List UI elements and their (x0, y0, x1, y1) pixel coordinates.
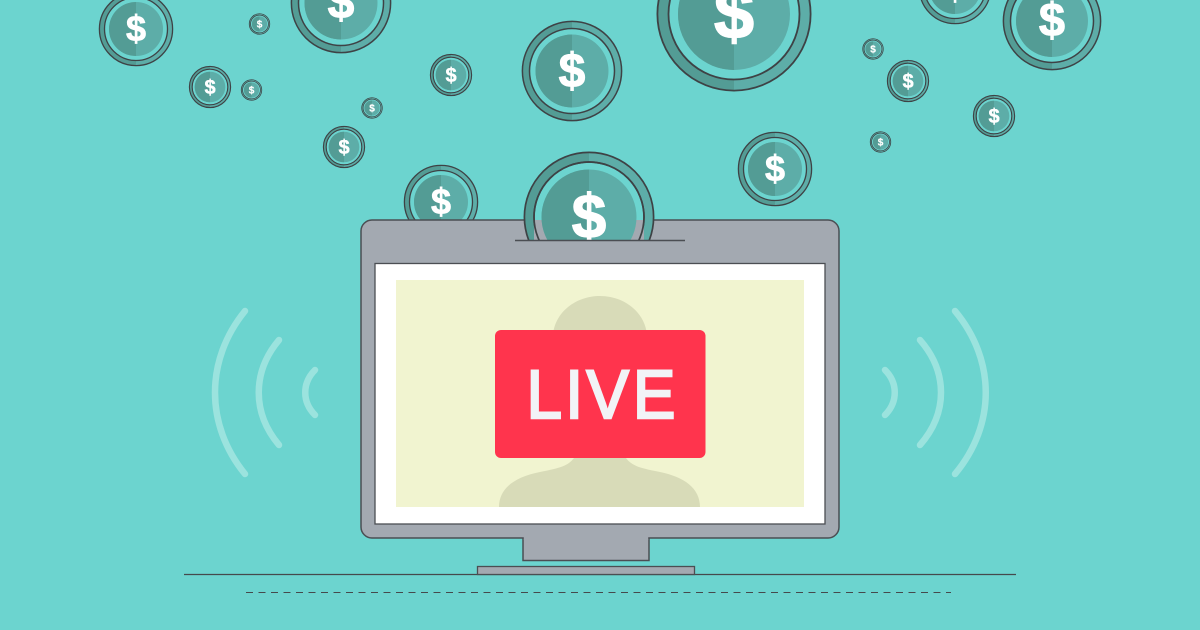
dashed ground line (246, 592, 951, 594)
coin: top right partially cropped (919, 0, 991, 24)
coin: small far left (189, 66, 231, 108)
coin: entering slot (524, 152, 654, 240)
coin: top left medium: $ (126, 8, 146, 49)
signal waves: right (885, 311, 986, 474)
coin: tiny 3: $ (369, 104, 375, 114)
coin: tiny 1: $ (257, 20, 263, 30)
coin: tiny 5: $ (878, 138, 884, 148)
live badge (495, 330, 706, 458)
coin: entering slot: $ (572, 183, 606, 252)
coin: right of monitor top (738, 132, 812, 206)
person silhouette (499, 296, 700, 507)
coin: small centre left (430, 54, 472, 96)
coin: tiny 4: $ (870, 44, 876, 56)
coin: tiny 1 (249, 14, 270, 34)
signal waves: left (215, 311, 315, 474)
screen (375, 264, 825, 524)
coin: top left large (291, 0, 391, 53)
coin: small far right (973, 95, 1015, 137)
coin: small left (323, 126, 365, 168)
coin: centre: $ (559, 45, 586, 98)
coin: small centre left: $ (445, 65, 457, 87)
live label: LIVE (527, 357, 675, 434)
coin: tiny 2 (241, 80, 262, 100)
coin: tiny 3 (362, 98, 382, 118)
coin: small right (887, 60, 929, 102)
monitor stand (523, 530, 649, 560)
coin: right of monitor top: $ (765, 148, 785, 189)
coin: centre (522, 21, 622, 121)
coin: top left medium (99, 0, 173, 66)
monitor (361, 220, 839, 574)
group: falling dollar coins (99, 0, 1101, 239)
monitor base (478, 566, 694, 574)
illustration: live stream earning money (98, 0, 1102, 593)
coin: small left: $ (338, 137, 350, 159)
monitor frame (361, 220, 839, 538)
coin: behind monitor (404, 165, 478, 239)
coin: small far right: $ (988, 106, 1000, 128)
coin: large top centre (657, 0, 811, 91)
ground line (184, 574, 1016, 576)
coin: behind monitor: $ (431, 181, 451, 222)
coin slot with coin dropping in (515, 152, 685, 242)
coin: tiny 5 (870, 132, 891, 152)
video area (396, 280, 804, 507)
coin: small far left: $ (204, 77, 216, 99)
coin: tiny 4 (863, 39, 883, 59)
coin: tiny 2: $ (249, 86, 255, 96)
coin: small right: $ (902, 71, 914, 93)
coin: top right large (1003, 0, 1101, 70)
stand top cover (524, 535, 648, 540)
coin slot (515, 240, 685, 242)
